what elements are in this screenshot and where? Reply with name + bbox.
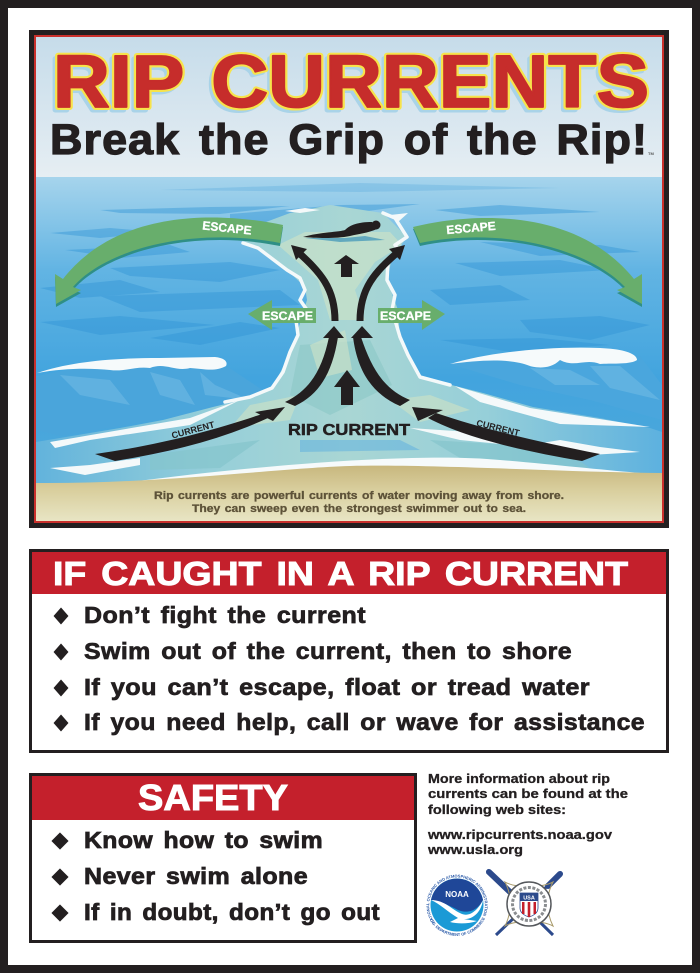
water streaks [40,183,650,352]
arrow: large green escape left [55,217,283,307]
bullet list: If you need help, call or wave for assistance [84,709,645,735]
bullet list [54,602,645,735]
text block: more information [427,771,628,857]
wave bodies [36,356,662,436]
caption: Rip currents are powerful currents of water moving away from shore. [154,490,564,502]
panel: rip current diagram [29,30,669,528]
title: RIP CURRENTS: RIP CURRENTS [53,40,649,123]
white surf line [130,458,655,482]
arrow: large green escape left: ESCAPE [202,218,252,238]
white foam lines [50,208,650,475]
text block: more information: following web sites: [428,802,566,817]
arrow: small green escape left [248,300,316,330]
bullet list: Swim out of the current, then to shore [84,638,572,664]
arrow: small green escape right: ESCAPE [380,309,431,323]
illustration: ocean water [36,177,662,487]
text block: more information: currents can be found at the [428,786,628,801]
label: CURRENT left: CURRENT [170,419,216,441]
text block: more information: More information about rip [428,771,610,786]
arrow: small green escape left: ESCAPE [262,309,313,323]
title: RIP CURRENTS: RIP CURRENTS [50,43,646,126]
bullet list: If in doubt, don’t go out [84,899,380,925]
bullet list: Know how to swim [84,827,323,853]
caption: They can sweep even the strongest swimmer out to sea. [192,503,526,515]
arrow: large green escape right [413,218,642,307]
right breaking wave crest [450,348,637,368]
sand [36,466,662,521]
bullet list: Don’t fight the current [84,602,366,628]
panel: safety [30,774,416,942]
bullet list [52,827,380,925]
text block: more information: www.usla.org [427,842,523,857]
title: RIP CURRENTS: RIP CURRENTS [53,40,649,123]
panel: if caught in a rip current [30,550,668,752]
swimmer [303,220,385,242]
text block: more information: www.ripcurrents.noaa.gov [427,827,613,842]
caption [154,490,564,515]
shallow water patches [150,232,590,470]
icon: USLA logo [487,870,562,935]
icon: NOAA logo: NOAA [445,890,469,899]
label: RIP CURRENT: RIP CURRENT [288,422,410,439]
heading: SAFETY [138,777,288,818]
arrows: black rip current flow [95,245,600,461]
icon: NOAA logo: NATIONAL OCEANIC AND ATMOSPHERIC ADMINISTRATION [426,874,488,924]
label: CURRENT right: CURRENT [475,418,521,438]
bullet list: Never swim alone [84,863,308,889]
bullet list: If you can’t escape, float or tread water [84,674,590,700]
left breaking wave crest [37,357,227,373]
heading: IF CAUGHT IN A RIP CURRENT [53,555,628,592]
subtitle: Break the Grip of the Rip!: Break the Grip of the Rip! [50,116,648,164]
arrow: small green escape right [378,300,445,330]
trademark mark: TM [648,151,654,156]
icon: NOAA logo: U.S. DEPARTMENT OF COMMERCE [430,917,485,936]
arrow: large green escape right: ESCAPE [446,219,496,237]
rip channel and shallow water [36,205,662,490]
icon: USLA logo: USA [523,896,535,902]
